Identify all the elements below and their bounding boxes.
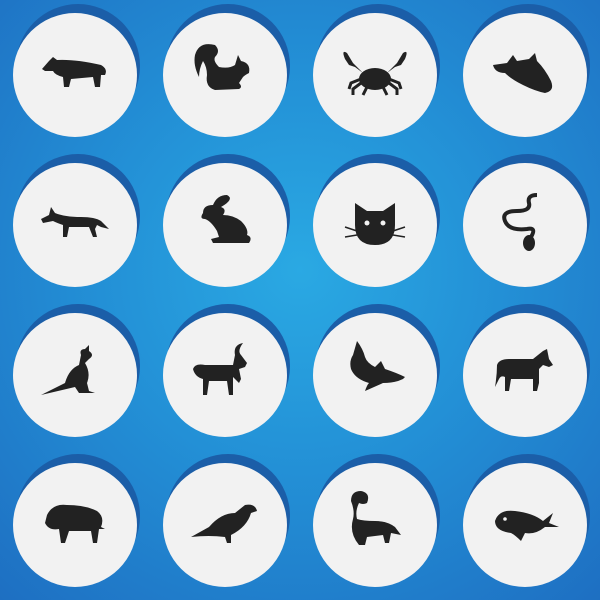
icon: bird bbox=[163, 454, 290, 587]
icon: goat bbox=[163, 304, 290, 437]
icon: bison bbox=[13, 454, 140, 587]
icon: wolf bbox=[13, 154, 140, 287]
icon: kangaroo bbox=[13, 304, 140, 437]
icon: cat head bbox=[313, 154, 440, 287]
icon: skunk bbox=[313, 454, 440, 587]
icon: dolphin bbox=[313, 304, 440, 437]
icon: cow head bbox=[463, 4, 590, 137]
icon: crab bbox=[313, 4, 440, 137]
icon: bear bbox=[13, 4, 140, 137]
icon: whale bbox=[463, 454, 590, 587]
icon: horse bbox=[463, 304, 590, 437]
icon: squirrel bbox=[163, 4, 290, 137]
icon: snake bbox=[463, 154, 590, 287]
icon: rabbit bbox=[163, 154, 290, 287]
